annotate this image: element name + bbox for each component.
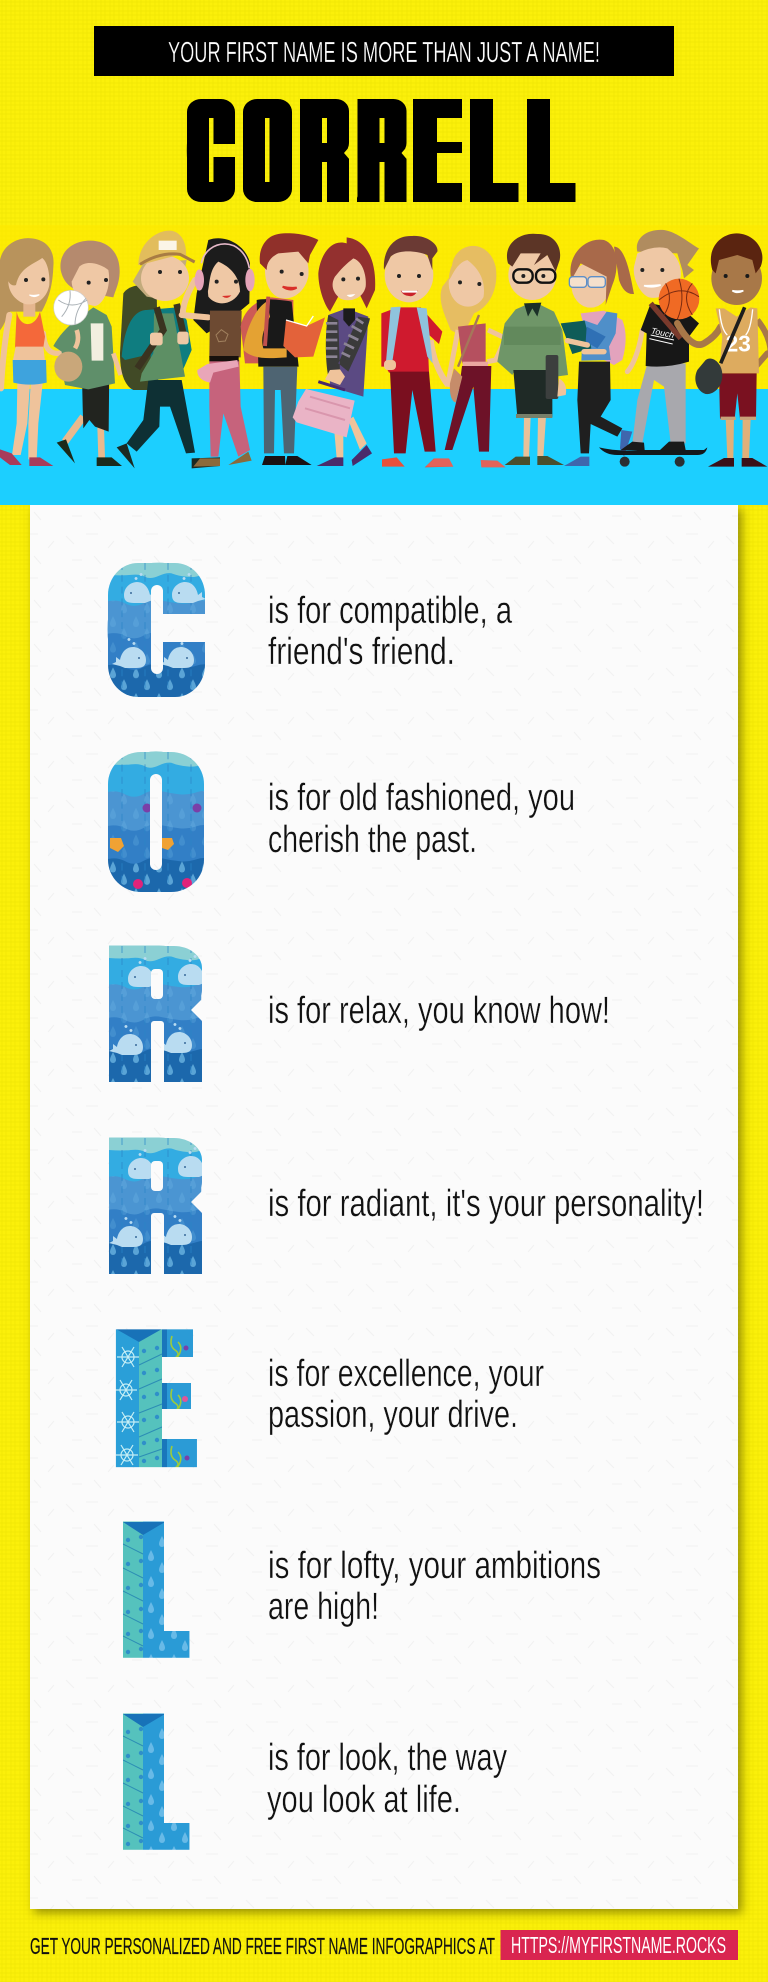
title: CORRELL: R xyxy=(308,102,341,202)
title: CORRELL: C xyxy=(195,101,227,200)
person: girl with ponytail and tablet xyxy=(561,240,634,466)
icon: letter O with shells xyxy=(108,751,204,892)
icon: letter C with whales xyxy=(108,562,205,697)
title: CORRELL: L xyxy=(472,87,514,216)
icon: second letter L with drops xyxy=(123,1711,191,1853)
panel: white card xyxy=(30,505,738,1909)
icon: letter E with snowflakes and seaweed xyxy=(116,1329,197,1468)
text block: second L: you look at life. xyxy=(267,1779,461,1821)
person: girl with pink headphones xyxy=(182,238,255,467)
floor: blue band xyxy=(0,389,768,505)
person: boy with cap and backpack xyxy=(117,231,220,468)
person: boy on skateboard with basketball xyxy=(599,230,721,467)
header bar xyxy=(94,26,674,76)
text block: C xyxy=(268,590,513,673)
text block: E: passion, your drive. xyxy=(268,1394,518,1436)
text block: L xyxy=(268,1545,601,1628)
text block: O: cherish the past. xyxy=(268,819,477,861)
text block: L: is for lofty, your ambitions xyxy=(268,1545,601,1587)
text block: E: is for excellence, your xyxy=(268,1353,544,1395)
text block: L: are high! xyxy=(268,1586,379,1628)
text block: R: is for relax, you know how! xyxy=(268,990,610,1032)
person: girl with pink bag xyxy=(293,237,375,466)
icon: letter R with whales xyxy=(109,946,202,1082)
text block: O: is for old fashioned, you xyxy=(268,777,575,819)
person: boy in red shirt xyxy=(381,236,453,467)
icon: letter L with drops xyxy=(123,1519,191,1661)
text block: O xyxy=(268,777,575,861)
person: boy with glasses xyxy=(497,234,568,465)
text block: second L xyxy=(267,1737,507,1821)
person: boy in basketball tank with bag xyxy=(695,233,768,467)
person: blonde girl xyxy=(426,246,506,467)
title: CORRELL: O xyxy=(251,101,284,200)
text block: C: friend's friend. xyxy=(268,631,455,673)
person: boy on skateboard with basketball: Touch xyxy=(650,326,675,340)
title: CORRELL: R xyxy=(365,102,398,202)
text block: E xyxy=(268,1353,544,1436)
text block: C: is for compatible, a xyxy=(268,590,513,632)
title: CORRELL xyxy=(186,99,576,202)
person: girl with volleyball xyxy=(53,241,122,466)
person: boy in basketball tank with bag: 23 xyxy=(726,331,751,357)
text block: second L: is for look, the way xyxy=(268,1737,507,1779)
title: CORRELL: E xyxy=(418,92,456,209)
illustration: group of students xyxy=(0,230,768,468)
card paper texture xyxy=(30,505,738,1909)
person: girl in orange top xyxy=(0,238,80,466)
person: boy with red book xyxy=(241,233,325,465)
title: CORRELL: L xyxy=(529,87,571,216)
icon: second letter R with whales xyxy=(109,1138,202,1274)
